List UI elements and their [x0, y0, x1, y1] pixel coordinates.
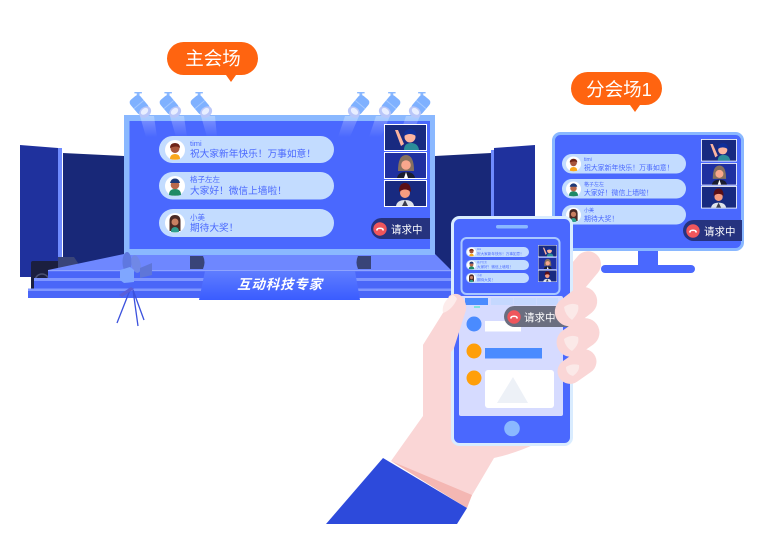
feed row 1: [466, 316, 521, 332]
chat message: timi: [562, 154, 686, 174]
hand: palm and wrist: [391, 310, 560, 508]
branch hall label: [571, 72, 662, 112]
hand: fingers over phone: [549, 281, 605, 389]
chat message: timi: 祝大家新年快乐！万事如意！: [190, 147, 316, 160]
finger 1: [549, 281, 603, 332]
home button: [504, 421, 520, 436]
stage: [28, 254, 451, 298]
video thumbnails: [384, 124, 427, 207]
chat message: timi: [159, 136, 334, 163]
video thumbnails: [701, 139, 737, 208]
request pill: 请求中: [704, 225, 736, 238]
finger 3: [553, 344, 601, 389]
request pill: [371, 218, 430, 239]
chat message: 格子左左: 格子左左: [584, 181, 604, 188]
chat message: 格子左左: 大家好！微信上墙啦！: [584, 188, 653, 197]
chat message: 小美: [562, 205, 686, 224]
phone mini screen: 期待大奖！: [477, 277, 495, 282]
main hall label: 主会场: [185, 48, 241, 69]
phone mini screen: 格子左左: [477, 260, 488, 264]
phone mini screen: 小美: [477, 273, 483, 277]
chat message: 小美: 小美: [584, 207, 594, 214]
phone: [452, 218, 572, 444]
request pill: 请求中: [391, 223, 422, 236]
hand: thumb over phone: [423, 294, 466, 360]
phone mini screen: [462, 238, 560, 294]
spotlights: [128, 92, 432, 120]
speaker: [31, 257, 78, 291]
phone mini screen: 祝大家新年快乐！万事如意！: [477, 251, 524, 256]
tabs: [465, 298, 558, 308]
stage banner: 互动科技专家: [237, 277, 325, 292]
request pill: [683, 220, 742, 241]
request pill on phone: [504, 306, 570, 327]
chat message: 小美: 期待大奖！: [190, 221, 238, 234]
request pill on phone: 请求中: [524, 311, 556, 324]
monitor: [554, 134, 742, 273]
chat message: 格子左左: [562, 179, 686, 198]
chat message: timi: timi: [584, 157, 592, 163]
phone mini screen: timi: [477, 248, 481, 251]
main screen: [124, 115, 435, 255]
chat message: 小美: 期待大奖！: [584, 214, 618, 223]
chat message: 格子左左: 大家好！微信上墙啦！: [190, 184, 287, 197]
speaker slot: [496, 225, 528, 228]
feed row 3: [466, 370, 554, 408]
stage banner: [199, 271, 360, 300]
phone mini screen: 大家好！微信上墙啦！: [477, 264, 513, 269]
chat message: 小美: 小美: [190, 212, 205, 222]
branch hall label: 分会场1: [586, 79, 652, 100]
feed row 2: [466, 344, 542, 358]
phone content panel: [459, 296, 563, 416]
main hall label: [167, 42, 258, 82]
light beams: [140, 116, 420, 137]
chat message: timi: 祝大家新年快乐！万事如意！: [584, 163, 674, 172]
chat message: 格子左左: 格子左左: [190, 174, 220, 184]
hand: index finger behind phone: [552, 246, 606, 304]
sleeve: [326, 458, 467, 524]
chat message: 格子左左: [159, 172, 334, 200]
chat message: timi: timi: [190, 139, 202, 148]
camera on tripod: [117, 252, 152, 326]
finger 2: [551, 312, 605, 363]
left stage panels: [20, 145, 124, 277]
chat message: 小美: [159, 209, 334, 237]
right stage panels: [435, 145, 535, 277]
